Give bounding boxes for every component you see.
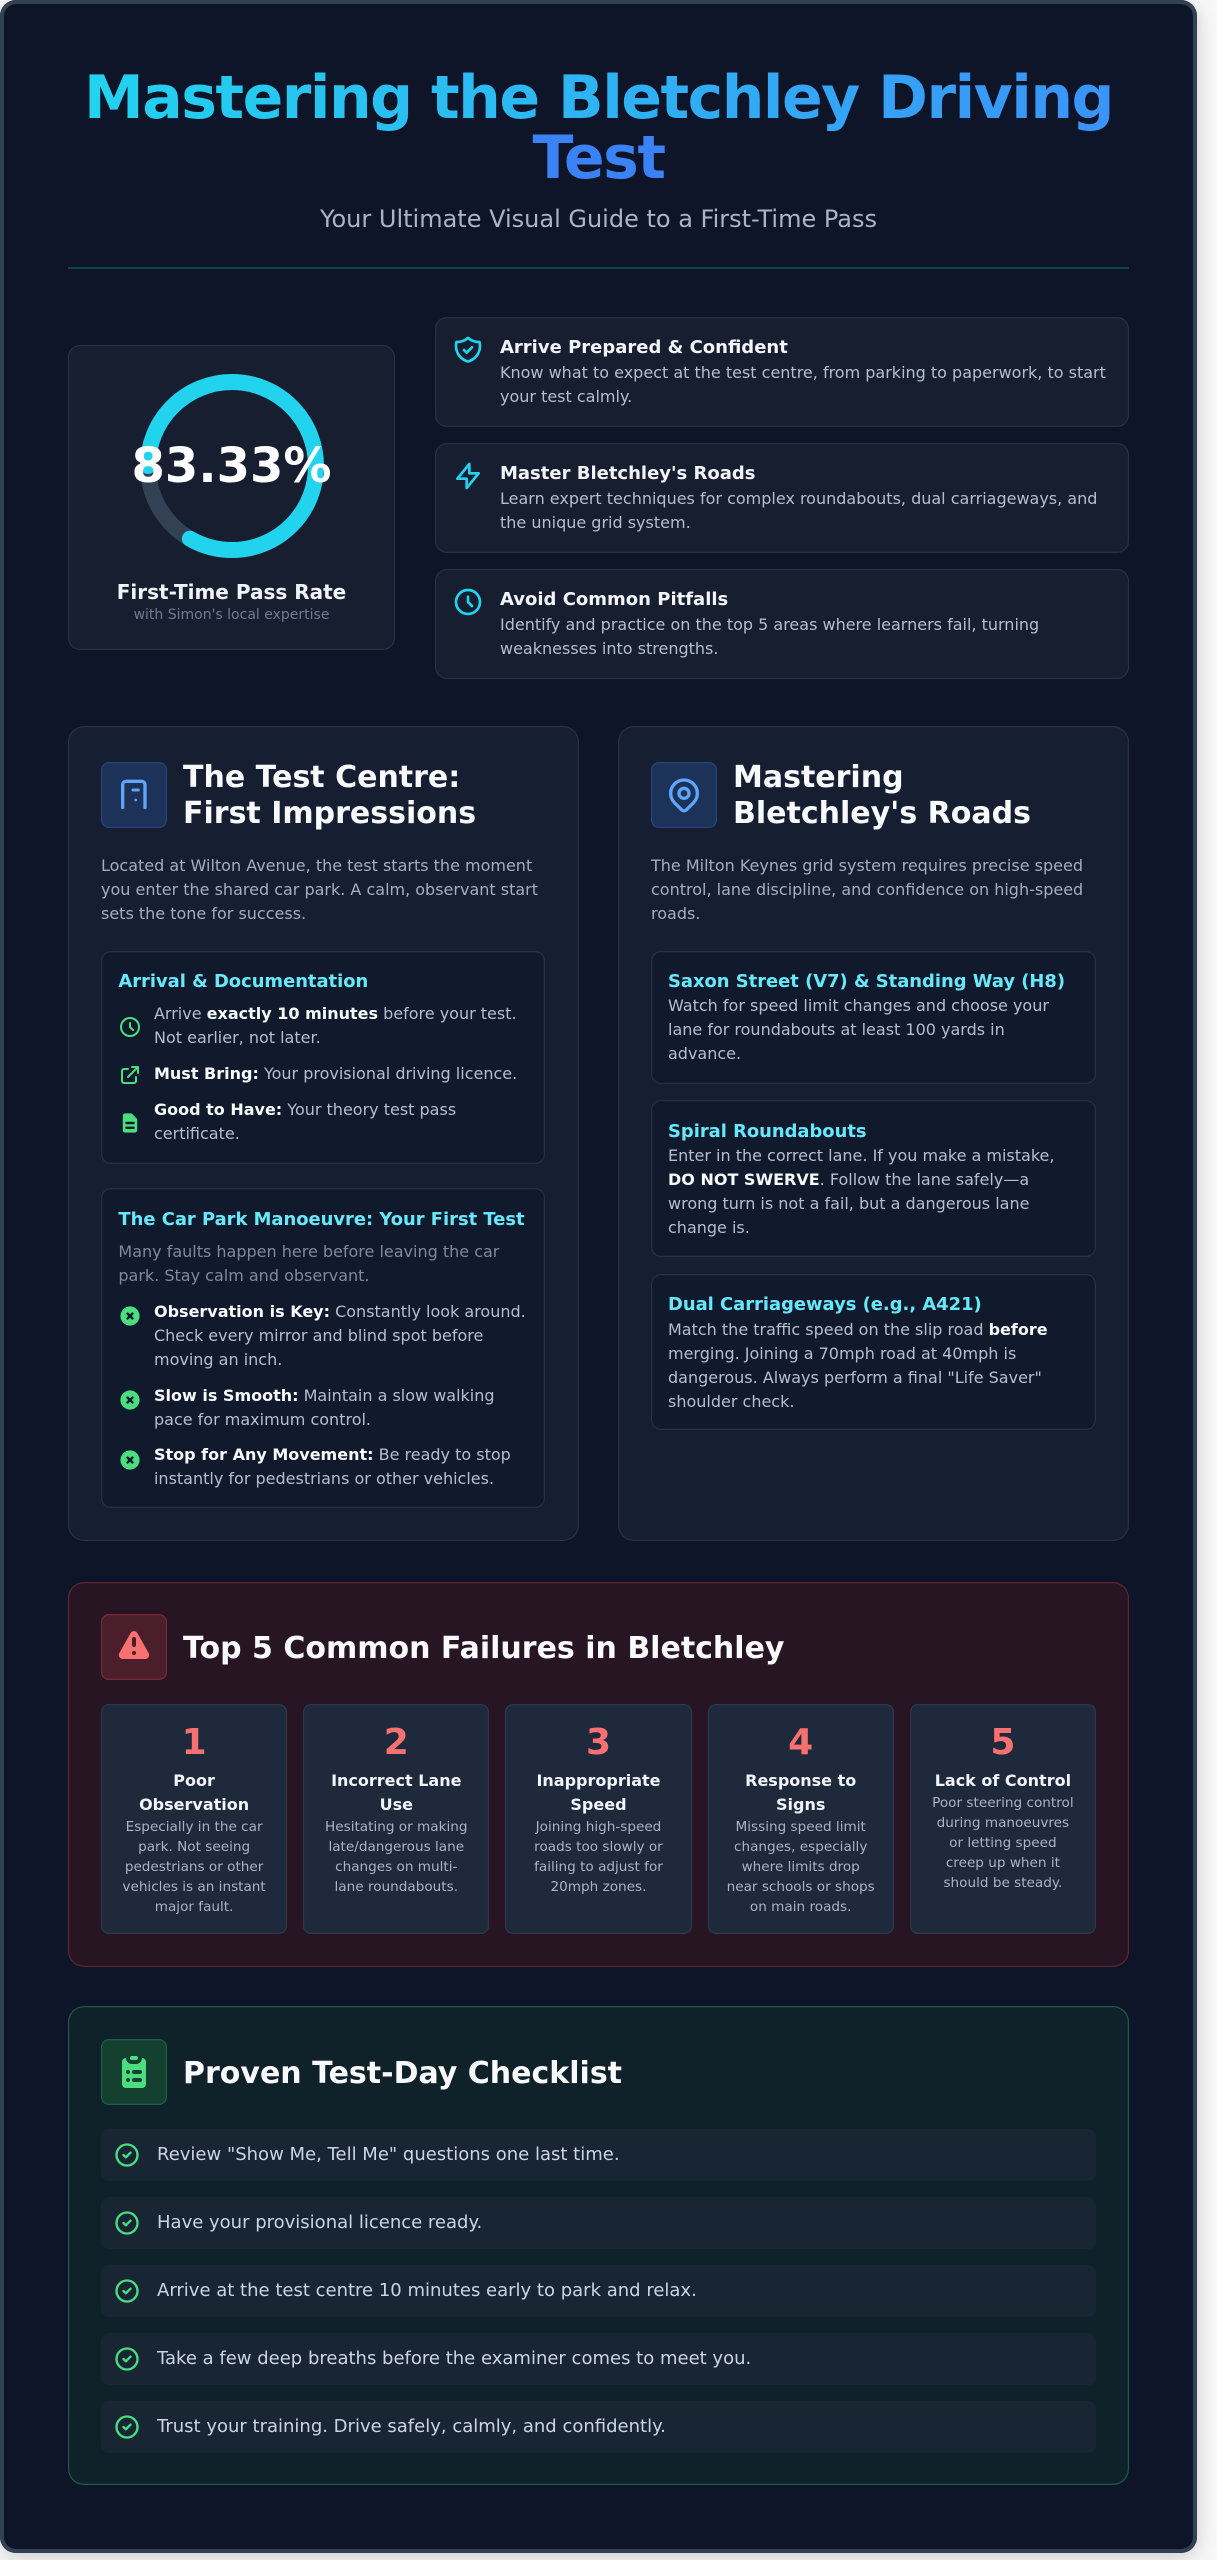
checklist item 4	[101, 2333, 1096, 2385]
card: failure 5	[910, 1704, 1096, 1934]
description: weaknesses into strengths.	[500, 639, 718, 658]
number: 5	[990, 1722, 1015, 1762]
text: Use	[380, 1795, 413, 1814]
panel: the test centre	[68, 726, 578, 1541]
text: failing to adjust for	[534, 1859, 663, 1875]
number: 1	[182, 1722, 207, 1762]
icon: warning	[101, 1614, 167, 1680]
card text	[668, 996, 1049, 1063]
text: pedestrians or other	[125, 1859, 263, 1875]
card text	[668, 1320, 1048, 1411]
icon: document	[122, 1113, 138, 1133]
text: Missing speed limit	[736, 1819, 866, 1835]
text: Inappropriate	[536, 1771, 661, 1790]
chart: progress ring 83.33%	[140, 374, 324, 558]
card text	[668, 1146, 1054, 1237]
heading: The Test Centre:	[183, 760, 460, 794]
checklist item 5: Trust your training. Drive safely, calmly, and confidently.	[157, 2416, 666, 2437]
card text: merging. Joining a 70mph road at 40mph is	[668, 1344, 1016, 1363]
slow is smooth: pace for maximum control.	[154, 1410, 371, 1429]
observation is key: Observation is Key: Constantly look around.	[154, 1302, 526, 1321]
card text: DO NOT SWERVE. Follow the lane safely—a	[668, 1170, 1029, 1189]
observation is key: Check every mirror and blind spot before	[154, 1326, 483, 1345]
card heading: Spiral Roundabouts	[668, 1121, 867, 1142]
heading	[183, 760, 476, 830]
number: 2	[384, 1722, 409, 1762]
card text: Watch for speed limit changes and choose your	[668, 996, 1049, 1015]
pass rate note: with Simon's local expertise	[134, 607, 329, 623]
card: car park manoeuvre	[101, 1188, 545, 1508]
text	[325, 1771, 468, 1895]
header divider	[68, 267, 1129, 269]
card text: Match the traffic speed on the slip road before	[668, 1320, 1048, 1339]
intro text	[650, 856, 1083, 923]
panel: pass rate	[68, 345, 395, 650]
text	[534, 1771, 663, 1895]
panel: avoid pitfalls	[435, 569, 1129, 679]
checklist item 2	[101, 2197, 1096, 2249]
card: failure 3	[505, 1704, 692, 1934]
intro text: you enter the shared car park. A calm, observant start	[101, 880, 538, 899]
heading: Proven Test-Day Checklist	[183, 2056, 622, 2090]
text: Incorrect Lane	[331, 1771, 461, 1790]
panel: master roads	[435, 443, 1129, 553]
card heading: Dual Carriageways (e.g., A421)	[668, 1294, 982, 1315]
text	[727, 1771, 875, 1915]
must bring: Must Bring: Your provisional driving licence.	[154, 1064, 517, 1083]
observation is key	[154, 1302, 526, 1369]
heading	[733, 760, 1031, 830]
text: Speed	[570, 1795, 627, 1814]
card text: wrong turn is not a fail, but a dangerous lane	[668, 1194, 1029, 1213]
card intro: Many faults happen here before leaving the car	[118, 1242, 499, 1261]
text: Observation	[139, 1795, 249, 1814]
card heading: Arrival & Documentation	[118, 971, 368, 992]
text: should be steady.	[943, 1875, 1062, 1891]
icon: x circle	[120, 1390, 140, 1410]
icon: clock	[454, 588, 482, 616]
icon: x circle	[120, 1450, 140, 1470]
text: Poor	[173, 1771, 215, 1790]
checklist item 3	[101, 2265, 1096, 2317]
intro text: sets the tone for success.	[101, 904, 306, 923]
intro text: control, lane discipline, and confidence on high-speed	[651, 880, 1083, 899]
text	[122, 1771, 266, 1915]
checklist item 1: Review "Show Me, Tell Me" questions one last time.	[157, 2144, 620, 2165]
good to have: certificate.	[154, 1124, 240, 1143]
text: changes, especially	[734, 1839, 867, 1855]
description	[500, 615, 1039, 658]
text: on main roads.	[750, 1899, 851, 1915]
text: changes on multi-	[335, 1859, 457, 1875]
icon: door	[101, 762, 167, 828]
card text: Enter in the correct lane. If you make a mistake,	[668, 1146, 1054, 1165]
good to have	[154, 1100, 456, 1143]
card text: lane for roundabouts at least 100 yards in	[668, 1020, 1005, 1039]
text: roads too slowly or	[534, 1839, 663, 1855]
pass rate label: First-Time Pass Rate	[117, 580, 346, 604]
slow is smooth: Slow is Smooth: Maintain a slow walking	[154, 1386, 495, 1405]
arrival time: Not earlier, not later.	[154, 1028, 321, 1047]
stop for any movement	[154, 1445, 511, 1488]
arrival time: Arrive exactly 10 minutes before your test.	[154, 1004, 517, 1023]
description: Identify and practice on the top 5 areas where learners fail, turning	[500, 615, 1039, 634]
card: failure 4	[708, 1704, 894, 1934]
stop for any movement: instantly for pedestrians or other vehicles.	[154, 1469, 494, 1488]
title: Test	[532, 123, 665, 193]
text: 20mph zones.	[550, 1879, 646, 1895]
title: Mastering the Bletchley Driving	[84, 63, 1113, 133]
text: creep up when it	[946, 1855, 1060, 1871]
heading: Arrive Prepared & Confident	[500, 337, 788, 358]
panel: arrive prepared	[435, 317, 1129, 427]
arrival time	[154, 1004, 517, 1047]
card text: shoulder check.	[668, 1392, 794, 1411]
description: your test calmly.	[500, 387, 632, 406]
card text: change is.	[668, 1218, 750, 1237]
text: Joining high-speed	[536, 1819, 661, 1835]
description: the unique grid system.	[500, 513, 691, 532]
heading: Master Bletchley's Roads	[500, 463, 756, 484]
card: spiral roundabouts	[651, 1100, 1096, 1257]
panel: top 5 failures	[68, 1582, 1129, 1967]
text: during manoeuvres	[937, 1815, 1069, 1831]
card: saxon street	[651, 951, 1096, 1084]
intro text: Located at Wilton Avenue, the test starts the moment	[101, 856, 532, 875]
number: 4	[788, 1722, 813, 1762]
text: Lack of Control	[935, 1771, 1071, 1790]
text: vehicles is an instant	[122, 1879, 266, 1895]
checklist item 4: Take a few deep breaths before the examiner comes to meet you.	[157, 2348, 751, 2369]
icon: clock	[120, 1017, 140, 1037]
card heading: Saxon Street (V7) & Standing Way (H8)	[668, 971, 1065, 992]
heading: Mastering	[733, 760, 904, 794]
checklist item 3: Arrive at the test centre 10 minutes early to park and relax.	[157, 2280, 697, 2301]
text	[932, 1771, 1074, 1891]
good to have: Good to Have: Your theory test pass	[154, 1100, 456, 1119]
heading: First Impressions	[183, 796, 476, 830]
card text: advance.	[668, 1044, 741, 1063]
text: where limits drop	[742, 1859, 860, 1875]
text: or letting speed	[949, 1835, 1057, 1851]
card intro: park. Stay calm and observant.	[118, 1266, 370, 1285]
description: Know what to expect at the test centre, from parking to paperwork, to start	[500, 363, 1106, 382]
text: park. Not seeing	[138, 1839, 250, 1855]
slow is smooth	[154, 1386, 495, 1429]
checklist item 5	[101, 2401, 1096, 2453]
heading: Top 5 Common Failures in Bletchley	[183, 1630, 784, 1666]
stop for any movement: Stop for Any Movement: Be ready to stop	[154, 1445, 511, 1464]
card intro	[118, 1242, 500, 1285]
text: near schools or shops	[727, 1879, 875, 1895]
text: Signs	[776, 1795, 825, 1814]
text: lane roundabouts.	[335, 1879, 458, 1895]
card: failure 1	[101, 1704, 287, 1934]
text: late/dangerous lane	[328, 1839, 464, 1855]
checklist item 2: Have your provisional licence ready.	[157, 2212, 482, 2233]
text: major fault.	[155, 1899, 233, 1915]
icon: x circle	[120, 1306, 140, 1326]
observation is key: moving an inch.	[154, 1350, 282, 1369]
intro text: roads.	[651, 904, 700, 923]
icon: shield	[454, 336, 482, 363]
icon: bolt	[456, 462, 480, 490]
heading: Bletchley's Roads	[733, 796, 1031, 830]
text: Hesitating or making	[325, 1819, 468, 1835]
intro text: The Milton Keynes grid system requires precise speed	[651, 856, 1083, 875]
text: Response to	[745, 1771, 856, 1790]
number: 3	[586, 1722, 611, 1762]
card text: dangerous. Always perform a final "Life Saver"	[668, 1368, 1042, 1387]
description: Learn expert techniques for complex roundabouts, dual carriageways, and	[500, 489, 1097, 508]
heading: Avoid Common Pitfalls	[500, 589, 728, 610]
panel: test-day checklist	[68, 2006, 1129, 2485]
card heading: The Car Park Manoeuvre: Your First Test	[118, 1208, 525, 1230]
card: dual carriageways	[651, 1274, 1096, 1430]
subtitle: Your Ultimate Visual Guide to a First-Time Pass	[320, 205, 877, 233]
text: Especially in the car	[126, 1819, 263, 1835]
description	[500, 363, 1106, 406]
title	[84, 63, 1113, 193]
panel: mastering bletchley's roads	[618, 726, 1129, 1541]
text: Poor steering control	[932, 1795, 1074, 1811]
pass rate value: 83.33%	[132, 438, 331, 494]
icon: external link	[121, 1066, 139, 1084]
icon: map pin	[651, 762, 717, 828]
card: failure 2	[303, 1704, 489, 1934]
icon: clipboard	[101, 2039, 167, 2105]
intro text	[101, 856, 538, 923]
card: arrival and documentation	[101, 951, 545, 1164]
description	[500, 489, 1097, 532]
checklist item 1	[101, 2129, 1096, 2181]
